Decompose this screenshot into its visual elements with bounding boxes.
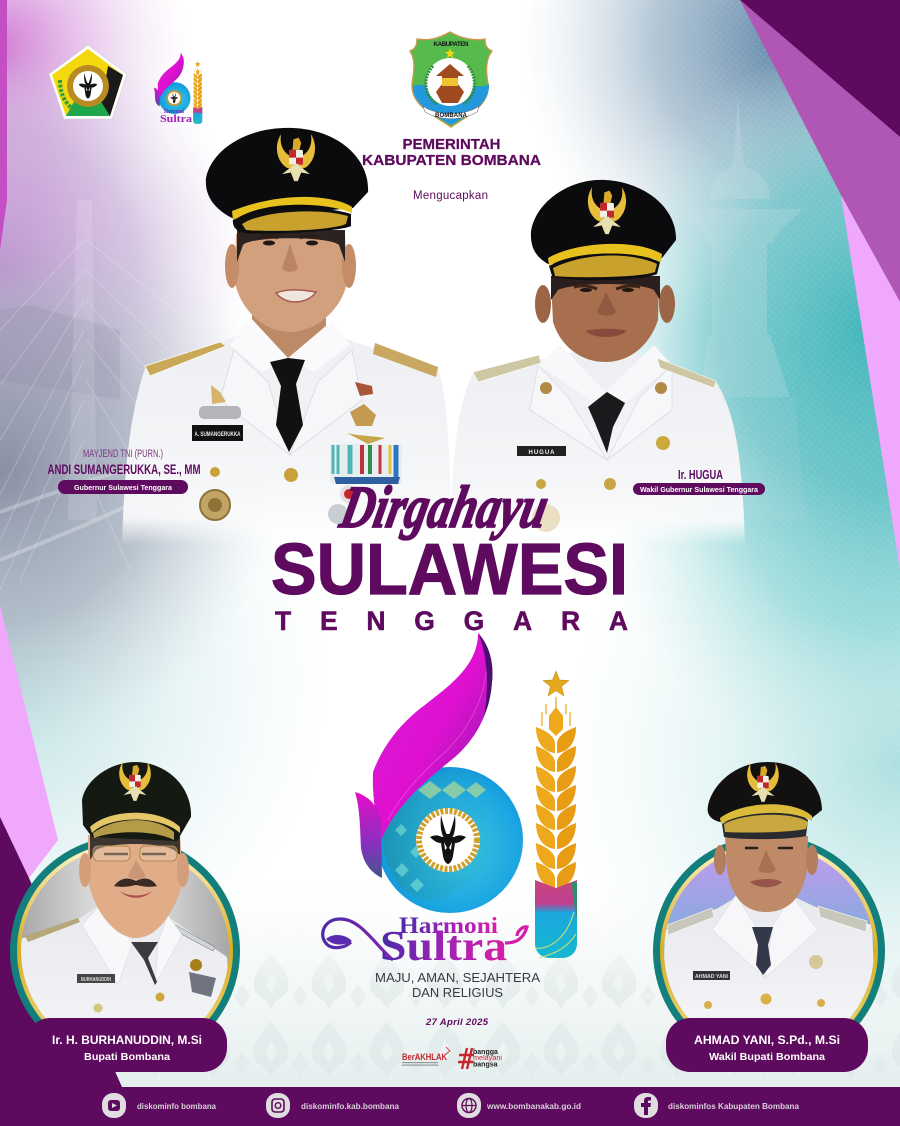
background: bridge silhouette bbox=[0, 200, 210, 590]
background: batik motif bbox=[227, 960, 900, 1048]
heading: Pemerintah Kabupaten Bombana: PEMERINTAH bbox=[402, 136, 500, 153]
logo: Harmoni Sultra small: Sultra bbox=[160, 113, 193, 125]
pill: Wakil Bupati name bbox=[666, 1018, 868, 1072]
shape: left pink band bbox=[0, 605, 58, 878]
label: Vice Governor name block bbox=[633, 468, 765, 495]
text: youtube handle: diskominfo bombana bbox=[137, 1102, 217, 1111]
text: facebook handle: diskominfos Kabupaten Bombana bbox=[668, 1102, 800, 1111]
logo: Harmoni Sultra main bbox=[323, 633, 577, 970]
label: Governor name block: Gubernur Sulawesi Tenggara bbox=[74, 483, 173, 492]
logo: BerAKHLAK bbox=[402, 1047, 450, 1066]
text: date: 27 April 2025 bbox=[425, 1017, 489, 1028]
icon: website bbox=[457, 1093, 481, 1118]
logo leaf bbox=[355, 633, 492, 878]
text: Mengucapkan: Mengucapkan bbox=[413, 190, 488, 202]
pill: Bupati name: Ir. H. BURHANUDDIN, M.Si bbox=[52, 1033, 202, 1047]
logo: Harmoni Sultra small bbox=[154, 53, 202, 125]
text: instagram handle: diskominfo.kab.bombana bbox=[301, 1102, 400, 1111]
text: slogan bbox=[375, 970, 540, 1000]
pill: Wakil Bupati name: AHMAD YANI, S.Pd., M.Si bbox=[694, 1033, 840, 1047]
photo: Bupati Bombana: BURHANUDDIN bbox=[81, 977, 111, 983]
heading: TENGGARA: TENGGARA bbox=[275, 606, 628, 636]
logo: Kabupaten Bombana shield bbox=[410, 32, 492, 127]
logo: bangga melayani bangsa: bangsa bbox=[473, 1062, 498, 1068]
text: website: www.bombanakab.go.id bbox=[486, 1102, 581, 1111]
text: slogan: MAJU, AMAN, SEJAHTERA bbox=[375, 970, 540, 985]
logo: bangga melayani bangsa: melayani bbox=[473, 1055, 502, 1062]
background: tower silhouette bbox=[678, 93, 805, 520]
logo text: Harmoni: Harmoni bbox=[399, 913, 499, 938]
logo globe bbox=[377, 767, 523, 913]
photo: Governor bbox=[122, 128, 452, 545]
heading: Pemerintah Kabupaten Bombana bbox=[362, 136, 541, 169]
shape: left dark purple band bbox=[0, 817, 122, 1087]
shape: right pink band bbox=[841, 195, 900, 570]
logo swash bbox=[323, 919, 527, 960]
photo: Bupati Bombana bbox=[10, 762, 240, 1023]
label: Governor name block bbox=[48, 448, 200, 494]
heading: Dirgahayu script: Dirgahayu bbox=[334, 475, 554, 541]
logo: BerAKHLAK: BerAKHLAK bbox=[402, 1052, 447, 1063]
footer bar bbox=[0, 1087, 900, 1126]
heading: Pemerintah Kabupaten Bombana: KABUPATEN BOMBANA bbox=[362, 152, 541, 169]
nametag: HUGUA bbox=[517, 446, 566, 456]
logo: bangga melayani bangsa bbox=[458, 1048, 502, 1069]
nametag: A. SUMANGERUKKA bbox=[192, 425, 243, 441]
icon: youtube bbox=[102, 1093, 126, 1118]
logo: Sulawesi Tenggara pentagon bbox=[49, 45, 127, 119]
photo: Wakil Bupati Bombana bbox=[653, 762, 885, 1024]
photo: Vice Governor bbox=[450, 180, 745, 545]
photo: Wakil Bupati Bombana: AHMAD YANI bbox=[695, 974, 728, 980]
pill: Bupati name: Bupati Bombana bbox=[84, 1051, 170, 1063]
text: small logo wordmark: Harmoni bbox=[164, 109, 184, 115]
logo wheat bbox=[535, 671, 577, 958]
icon: facebook bbox=[634, 1093, 658, 1118]
logo: Kabupaten Bombana shield: KABUPATEN bbox=[434, 41, 469, 48]
logo text: Sultra: Sultra bbox=[380, 924, 507, 970]
nametag: HUGUA: HUGUA bbox=[528, 450, 555, 456]
logo: Kabupaten Bombana shield: BOMBANA bbox=[435, 113, 468, 119]
icon: instagram bbox=[266, 1093, 290, 1118]
shape: right mid purple band bbox=[740, 0, 900, 302]
label: Governor name block: MAYJEND TNI (PURN.) bbox=[83, 448, 163, 460]
label: Governor name block: ANDI SUMANGERUKKA, SE., MM bbox=[48, 462, 200, 477]
nametag: A. SUMANGERUKKA: A. SUMANGERUKKA bbox=[194, 432, 241, 438]
pill: Bupati name bbox=[26, 1018, 227, 1072]
heading: SULAWESI: SULAWESI bbox=[271, 529, 628, 610]
shape: left top magenta strip bbox=[0, 0, 7, 250]
logo: bangga melayani bangsa: bangga bbox=[473, 1049, 498, 1056]
text: slogan: DAN RELIGIUS bbox=[412, 985, 503, 1000]
label: Vice Governor name block: Ir. HUGUA bbox=[678, 468, 723, 482]
label: Vice Governor name block: Wakil Gubernur Sulawesi Tenggara bbox=[640, 485, 759, 494]
shape: right dark purple corner bbox=[740, 0, 900, 137]
pill: Wakil Bupati name: Wakil Bupati Bombana bbox=[709, 1051, 825, 1063]
